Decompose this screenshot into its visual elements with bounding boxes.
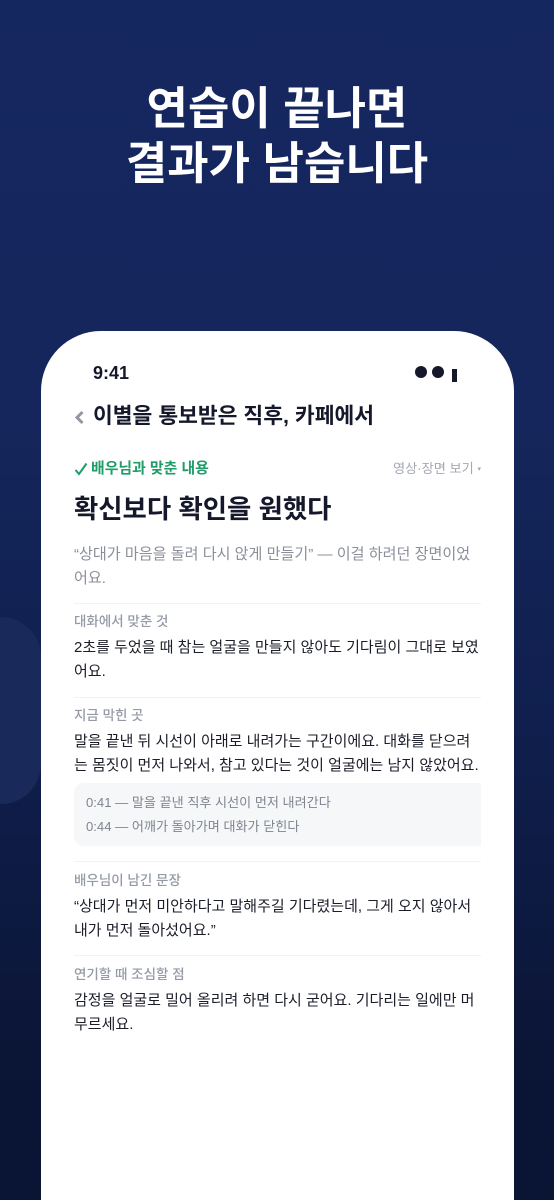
section: acting caution — [74, 967, 474, 1033]
status bar time: 9:41 — [93, 363, 129, 383]
title: 연습이 끝나면 — [147, 83, 407, 134]
section: actor's sentence: “상대가 먼저 미안하다고 말해주길 기다렸는데, 그게 오지 않아서 — [74, 898, 471, 915]
section: acting caution: 연기할 때 조심할 점 — [74, 967, 185, 982]
back chevron icon — [75, 411, 84, 424]
timestamps box — [74, 783, 481, 846]
section: matched in conversation: 어요. — [74, 663, 106, 680]
section: actor's sentence: 내가 먼저 돌아섰어요.” — [74, 922, 216, 939]
section: acting caution: 무르세요. — [74, 1016, 133, 1033]
phone screen panel — [41, 331, 514, 1200]
section: matched in conversation: 2초를 두었을 때 참는 얼굴을 만들지 않아도 기다림이 그대로 보였 — [74, 639, 479, 656]
section: acting caution: 감정을 얼굴로 밀어 올리려 하면 다시 굳어요. 기다리는 일에만 머 — [74, 992, 474, 1009]
section: matched in conversation: 대화에서 맞춘 것 — [74, 614, 168, 629]
timestamps box: 0:44 — 어깨가 돌아가며 대화가 닫힌다 — [86, 819, 299, 834]
title: 결과가 남습니다 — [126, 138, 428, 189]
section: actor's sentence — [74, 873, 471, 939]
section: where stuck: 지금 막힌 곳 — [74, 708, 144, 723]
section: where stuck — [74, 708, 481, 846]
status bar icons — [415, 366, 457, 382]
timestamps box: 0:41 — 말을 끝낸 직후 시선이 먼저 내려간다 — [86, 795, 331, 810]
title — [126, 83, 428, 189]
check icon — [74, 462, 88, 476]
intro text: 어요. — [74, 570, 106, 587]
video scene toggle: 영상·장면 보기 ▾ — [393, 461, 481, 476]
screen heading: 이별을 통보받은 직후, 카페에서 — [93, 404, 374, 428]
matched content label: 배우님과 맞춘 내용 — [91, 461, 209, 477]
section: where stuck: 말을 끝낸 뒤 시선이 아래로 내려가는 구간이에요. 대화를 닫으려 — [74, 733, 470, 750]
intro text: “상대가 마음을 돌려 다시 앉게 만들기” — 이걸 하려던 장면이었 — [74, 546, 470, 563]
section: actor's sentence: 배우님이 남긴 문장 — [74, 873, 181, 888]
result headline: 확신보다 확인을 원했다 — [74, 494, 331, 524]
background glow — [0, 617, 41, 804]
section: where stuck: 는 몸짓이 먼저 나와서, 참고 있다는 것이 얼굴에는 남지 않았어요. — [74, 757, 479, 774]
section: matched in conversation — [74, 614, 479, 680]
intro text — [74, 546, 470, 587]
